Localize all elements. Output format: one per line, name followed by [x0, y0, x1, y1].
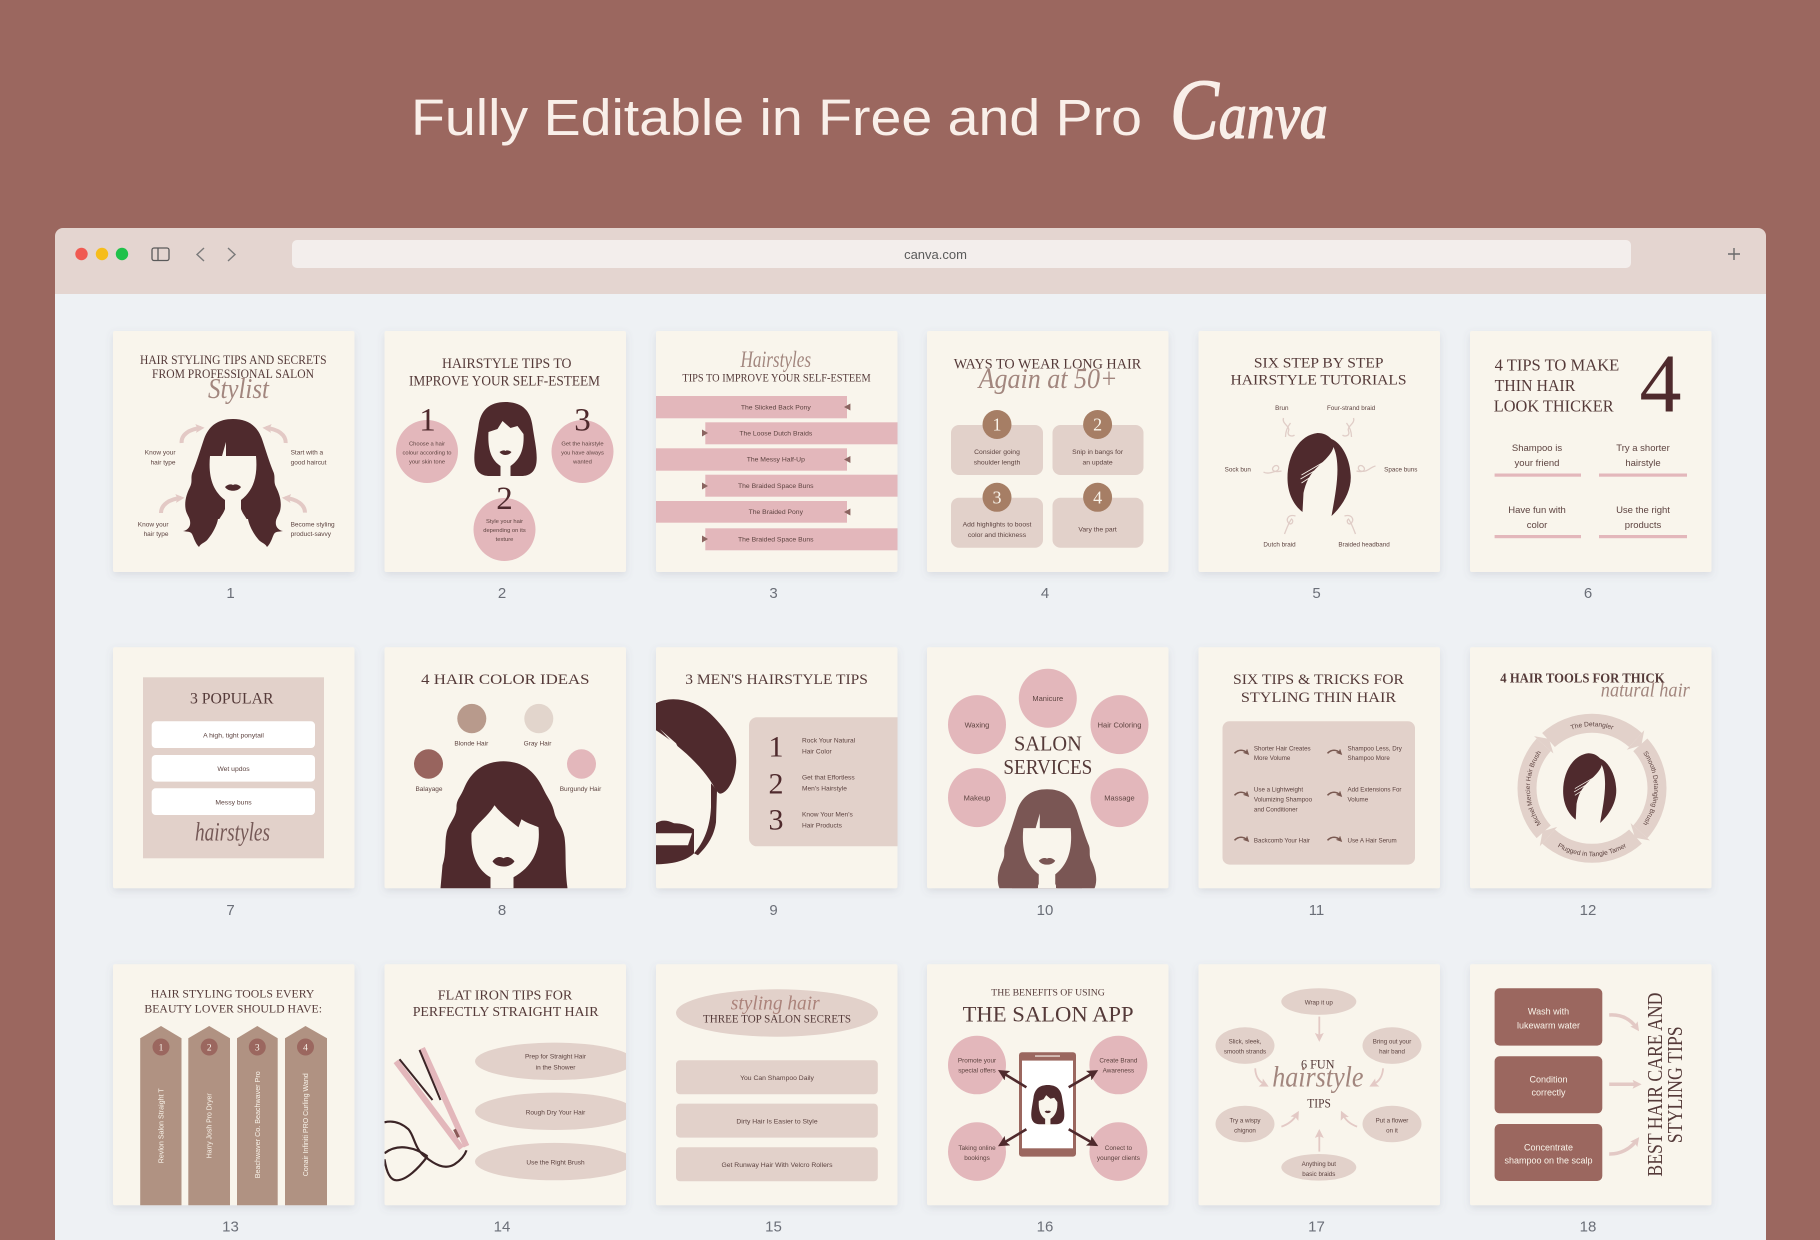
badge numbers: [159, 1043, 308, 1053]
service labels: Massage: [1104, 793, 1135, 802]
tip text: Men's Hairstyle: [802, 785, 847, 792]
colour swatches: [414, 704, 596, 779]
script word: Stylist: [208, 374, 270, 405]
tip text: Use A Hair Serum: [1348, 837, 1397, 844]
small arrows: [1234, 750, 1340, 840]
title: THREE TOP SALON SECRETS: [703, 1014, 851, 1026]
tip text: Add Extensions For: [1348, 786, 1402, 793]
labels: Space buns: [1384, 466, 1417, 474]
tips panel: [1222, 721, 1415, 865]
tip text: Volume: [1348, 796, 1369, 803]
idea text: chignon: [1234, 1127, 1256, 1134]
tip text: [963, 449, 1124, 539]
badge numbers: 4: [303, 1043, 308, 1053]
step numbers: [419, 403, 591, 517]
curved arrows: [161, 428, 305, 513]
swatch labels: Burgundy Hair: [560, 786, 602, 793]
title: [963, 989, 1134, 1026]
panel: card 16: [927, 964, 1168, 1205]
tip boxes: [951, 425, 1144, 548]
ring labels: [1525, 722, 1658, 857]
tip text: Hair Products: [802, 822, 843, 829]
tip text: Use a Lightweight: [1254, 786, 1303, 793]
tip text: shoulder length: [974, 460, 1020, 466]
centre title: hairstyle: [1272, 1061, 1364, 1094]
badge numbers: 3: [255, 1043, 260, 1053]
badge numbers: 1: [992, 414, 1002, 434]
panel: card 6: [1470, 331, 1712, 572]
ring labels: Michel Mercier Hair Brush: [1525, 751, 1541, 826]
tip text: Add highlights to boost: [963, 522, 1031, 528]
panel: card 10: [926, 648, 1170, 892]
headline: Fully Editable in Free and Pro: [411, 89, 1142, 146]
panel: card 5: [1198, 331, 1440, 572]
tips: color: [1527, 520, 1547, 531]
labels: product-savvy: [291, 531, 332, 538]
tip text: Condition: [1529, 1074, 1568, 1084]
card numbers: 16: [1037, 1218, 1053, 1236]
step numbers: 2: [496, 481, 513, 517]
tips: Use the right: [1616, 505, 1670, 516]
hair illustration: [440, 761, 568, 888]
tip text: Snip in bangs for: [1072, 449, 1124, 456]
browser window: [55, 228, 1766, 1240]
labels: Become styling: [291, 522, 335, 528]
title: HAIR STYLING TIPS AND SECRETS: [140, 352, 326, 367]
arrow columns: [140, 1026, 327, 1205]
benefit text: [958, 1057, 1140, 1162]
underlines: [1495, 474, 1687, 538]
tip text: an update: [1082, 460, 1113, 466]
icon: new tab plus: [1728, 248, 1740, 260]
badge numbers: [992, 414, 1102, 507]
tip text: More Volume: [1254, 755, 1291, 762]
card numbers: 11: [1309, 902, 1324, 919]
title: STYLING THIN HAIR: [1241, 690, 1396, 706]
braid icons: [1264, 418, 1376, 534]
labels: Brun: [1275, 405, 1289, 412]
card numbers: 9: [769, 902, 778, 919]
ribbon text: The Messy Half-Up: [747, 456, 805, 464]
title: BEAUTY LOVER SHOULD HAVE:: [144, 1001, 322, 1015]
tip text: [1254, 745, 1403, 844]
service labels: Makeup: [964, 793, 990, 802]
title: HAIRSTYLE TIPS TO: [442, 356, 572, 372]
badge numbers: 3: [992, 487, 1002, 507]
idea text: smooth strands: [1224, 1048, 1266, 1055]
ring labels: Plugged in Tangle Tamer: [1558, 843, 1626, 857]
ring labels: Smooth Detangling Brush: [1643, 751, 1658, 825]
title: [1233, 672, 1404, 706]
labels: Sock bun: [1225, 466, 1251, 474]
step text: colour according to: [403, 450, 451, 456]
tip text: [525, 1053, 587, 1166]
swatch labels: Gray Hair: [524, 740, 552, 747]
labels: Know your: [145, 450, 176, 456]
option text: Wet updos: [217, 766, 250, 773]
labels: Dutch braid: [1263, 542, 1296, 548]
panel: card 2: [384, 331, 626, 572]
tip text: Get that Effortless: [802, 774, 855, 781]
secret text: Dirty Hair Is Easier to Style: [736, 1118, 818, 1125]
tip numbers: 2: [768, 767, 784, 800]
title: [409, 356, 600, 390]
card numbers: 18: [1580, 1218, 1596, 1236]
tip text: Volumizing Shampoo: [1254, 796, 1313, 803]
tip text: Use the Right Brush: [526, 1159, 585, 1166]
tip text: Wash with: [1528, 1006, 1569, 1016]
step text: texture: [496, 537, 513, 543]
title: 3 MEN'S HAIRSTYLE TIPS: [685, 672, 868, 688]
title: SALON: [1014, 732, 1082, 756]
tip text: in the Shower: [536, 1064, 576, 1071]
script words: natural hair: [1601, 680, 1690, 702]
title: 4 HAIR COLOR IDEAS: [421, 672, 589, 688]
vertical labels: Conair Infiniti PRO Curling Wand: [303, 1073, 310, 1176]
card numbers: 6: [1584, 585, 1592, 602]
step text: you have always: [561, 450, 604, 456]
headline: [411, 63, 1328, 157]
vertical labels: Harry Josh Pro Dryer: [207, 1093, 214, 1158]
tip text: Rough Dry Your Hair: [526, 1109, 586, 1116]
title ellipse: [676, 989, 878, 1037]
secret text: You Can Shampoo Daily: [740, 1075, 815, 1082]
arrows: [1002, 1072, 1094, 1144]
step text: Get the hairstyle: [561, 442, 604, 448]
tips: Try a shorter: [1616, 443, 1670, 454]
service labels: Waxing: [965, 720, 989, 729]
script word: hairstyles: [195, 818, 270, 847]
title: THIN HAIR: [1495, 376, 1576, 395]
logo: Canva wordmark: Canva: [1170, 63, 1328, 157]
icon: back and forward chevrons: [197, 248, 235, 261]
tips: Shampoo is: [1512, 443, 1562, 454]
service labels: [964, 694, 1141, 802]
man's face illustration: [656, 699, 736, 864]
panel: card 18: [1470, 964, 1712, 1205]
vertical title: BEST HAIR CARE AND: [1643, 993, 1667, 1177]
idea text: Bring out your: [1373, 1038, 1411, 1045]
idea text: Slick, sleek,: [1229, 1038, 1262, 1045]
ribbon text: The Braided Space Buns: [738, 536, 814, 544]
title: TIPS TO IMPROVE YOUR SELF-ESTEEM: [682, 373, 871, 385]
secret boxes: [676, 1060, 878, 1181]
number badges: [982, 410, 1112, 512]
title: 4 HAIR TOOLS FOR THICK: [1500, 670, 1665, 685]
tip boxes: [1495, 988, 1602, 1181]
vertical labels: Beachwaver Co. Beachwaver Pro: [255, 1071, 262, 1178]
title: HAIR STYLING TOOLS EVERY: [151, 986, 315, 1000]
tip text: color and thickness: [968, 532, 1027, 539]
title: [413, 989, 599, 1020]
vertical labels: [158, 1071, 310, 1178]
tip numbers: 3: [768, 803, 784, 836]
service labels: Manicure: [1032, 694, 1063, 703]
tip text: Prep for Straight Hair: [525, 1053, 587, 1060]
card numbers: 7: [226, 902, 235, 919]
step circles: [396, 420, 614, 561]
ribbon text: [738, 404, 814, 544]
tip text: Shampoo Less, Dry: [1348, 745, 1403, 752]
tips: products: [1625, 520, 1661, 531]
secret text: Get Runway Hair With Velcro Rollers: [721, 1162, 833, 1169]
benefit text: bookings: [964, 1155, 990, 1162]
step numbers: 3: [574, 403, 591, 439]
title: FLAT IRON TIPS FOR: [438, 989, 573, 1004]
ribbon text: The Slicked Back Pony: [741, 404, 811, 412]
badge numbers: 2: [207, 1043, 212, 1053]
title: HAIRSTYLE TUTORIALS: [1230, 372, 1406, 388]
icon: flat iron: [384, 1048, 466, 1180]
card numbers: 14: [494, 1218, 510, 1236]
idea text: on it: [1386, 1127, 1398, 1134]
ribbon text: The Braided Pony: [749, 509, 804, 516]
swatch labels: [415, 740, 602, 793]
hair illustration: [1563, 753, 1616, 823]
card numbers: 8: [498, 902, 506, 919]
benefit text: younger clients: [1097, 1155, 1140, 1162]
benefit circles: [948, 1036, 1147, 1181]
service circles: [948, 669, 1148, 827]
idea text: hair band: [1379, 1048, 1405, 1055]
script words: Again at 50+: [977, 364, 1118, 395]
tips: hairstyle: [1625, 458, 1661, 469]
title: [1003, 732, 1092, 779]
arrows: [1255, 1017, 1383, 1152]
labels: Start with a: [291, 450, 323, 456]
tip text: correctly: [1531, 1087, 1566, 1097]
tip text: lukewarm water: [1517, 1020, 1580, 1030]
number badges: [152, 1038, 314, 1056]
swatch labels: Balayage: [415, 786, 443, 793]
hair illustration: [998, 789, 1096, 888]
inner panel: [143, 677, 324, 858]
tip text: Hair Color: [802, 748, 832, 755]
idea ellipses: [1216, 988, 1422, 1181]
card numbers: 2: [498, 585, 506, 602]
benefit text: Awareness: [1103, 1067, 1134, 1074]
panel: card 11: [1198, 647, 1440, 888]
card numbers: 1: [226, 585, 235, 602]
icon: sidebar: [152, 248, 169, 260]
badge numbers: 1: [159, 1043, 164, 1053]
labels: [138, 450, 335, 538]
script word: Hairstyles: [740, 347, 811, 372]
browser page area: [55, 294, 1766, 1240]
card numbers: 10: [1037, 902, 1053, 919]
idea text: Try a wispy: [1229, 1117, 1261, 1124]
panel: card 17: [1198, 964, 1440, 1205]
title: [1230, 355, 1406, 388]
vertical title: [1643, 993, 1687, 1177]
tip numbers: [768, 730, 784, 836]
panel: card 8: [384, 647, 626, 888]
benefit text: Taking online: [958, 1145, 996, 1152]
tip text: Concentrate: [1524, 1142, 1573, 1152]
tip text: shampoo on the scalp: [1504, 1155, 1593, 1165]
ring labels: The Detangler: [1570, 722, 1614, 730]
step text: your skin tone: [409, 460, 445, 466]
title: [140, 352, 326, 381]
option text: Messy buns: [215, 799, 252, 806]
idea text: Anything but: [1302, 1161, 1336, 1168]
icon: phone: [1019, 1052, 1076, 1157]
card numbers: 12: [1580, 902, 1596, 919]
address bar: [292, 240, 1631, 268]
labels: Braided headband: [1338, 542, 1390, 548]
window controls: [75, 248, 128, 260]
title: THE SALON APP: [963, 1001, 1134, 1026]
step text: wanted: [572, 460, 592, 466]
card numbers: 3: [769, 585, 778, 602]
tip text: Shorter Hair Creates: [1254, 745, 1311, 752]
idea text: Wrap it up: [1305, 999, 1333, 1006]
labels: Know your: [138, 522, 169, 528]
card numbers: 15: [765, 1218, 782, 1236]
ribbon bars: [656, 396, 898, 550]
tip text: Shampoo More: [1348, 755, 1390, 762]
title: SERVICES: [1003, 755, 1092, 779]
tip text: Consider going: [974, 449, 1020, 456]
step text: Style your hair: [486, 519, 523, 525]
script words: styling hair: [731, 992, 820, 1014]
tips: Have fun with: [1508, 505, 1566, 516]
title: IMPROVE YOUR SELF-ESTEEM: [409, 374, 600, 390]
title: WAYS TO WEAR LONG HAIR: [954, 356, 1142, 372]
title: 3 POPULAR: [190, 690, 274, 707]
step text: Choose a hair: [409, 442, 445, 448]
step text: [403, 442, 604, 543]
tip text: [802, 737, 856, 829]
labels: hair type: [151, 460, 176, 466]
address bar: canva.com: [904, 247, 967, 262]
badge numbers: 4: [1093, 487, 1102, 507]
labels: hair type: [144, 531, 169, 538]
tips: [1508, 443, 1670, 531]
labels: [1225, 405, 1417, 548]
card numbers: 17: [1308, 1218, 1325, 1236]
vertical title: STYLING TIPS: [1663, 1026, 1687, 1143]
panel: card 14: [384, 964, 634, 1205]
tips: your friend: [1515, 458, 1559, 469]
swatch labels: Blonde Hair: [454, 740, 489, 747]
secret text: [721, 1075, 833, 1169]
tips panel: [749, 717, 898, 846]
panel: card 9: [656, 647, 898, 888]
title: [1494, 356, 1619, 416]
panel: card 3: [656, 331, 898, 572]
tip text: Rock Your Natural: [802, 737, 856, 744]
panel: card 12: [1469, 648, 1712, 892]
vertical labels: Revlon Salon Straight T: [158, 1088, 166, 1163]
title: PERFECTLY STRAIGHT HAIR: [413, 1005, 599, 1020]
labels: good haircut: [291, 460, 327, 466]
tip text: and Conditioner: [1254, 806, 1298, 813]
browser toolbar: [55, 228, 1766, 294]
tip text: Backcomb Your Hair: [1254, 837, 1310, 844]
arrows: [1609, 1015, 1638, 1154]
tip ellipses: [475, 1043, 634, 1180]
card numbers: 4: [1041, 585, 1049, 602]
title: [144, 986, 322, 1015]
badge numbers: 2: [1093, 414, 1102, 434]
card numbers: 13: [222, 1218, 239, 1236]
benefit text: Conect to: [1105, 1145, 1133, 1152]
centre title: 6 FUN: [1301, 1056, 1335, 1071]
tip numbers: 1: [768, 730, 784, 763]
option text: [203, 732, 264, 806]
hair illustration: [1288, 433, 1351, 516]
panel: card 13: [113, 964, 354, 1205]
panel: card 15: [656, 964, 898, 1205]
big number: 4: [1640, 338, 1682, 431]
ribbon text: The Braided Space Buns: [738, 483, 814, 490]
benefit text: Create Brand: [1099, 1057, 1138, 1064]
panel: card 7: [113, 647, 354, 888]
service labels: Hair Coloring: [1098, 720, 1141, 729]
card numbers: [222, 585, 1596, 1236]
panel: card 4: [927, 331, 1168, 572]
ribbon arrows: [702, 404, 850, 542]
tip text: Vary the part: [1078, 526, 1117, 534]
ribbon text: The Loose Dutch Braids: [739, 430, 813, 438]
title: THE BENEFITS OF USING: [991, 989, 1105, 999]
idea text: Put a flower: [1376, 1117, 1408, 1124]
option text: A high, tight ponytail: [203, 732, 264, 739]
step numbers: 1: [419, 403, 436, 439]
title: FROM PROFESSIONAL SALON: [152, 366, 315, 381]
title: 4 TIPS TO MAKE: [1495, 356, 1619, 375]
title: SIX TIPS & TRICKS FOR: [1233, 672, 1404, 688]
hair illustration: [1027, 1082, 1069, 1126]
labels: Four-strand braid: [1327, 405, 1376, 412]
step text: depending on its: [483, 528, 526, 534]
centre title: [1272, 1056, 1364, 1110]
benefit text: special offers: [958, 1067, 996, 1074]
title: SIX STEP BY STEP: [1254, 355, 1384, 371]
card numbers: 5: [1312, 585, 1321, 602]
panel: card 1: [113, 331, 354, 572]
hair illustration: [474, 402, 537, 477]
hair illustration: [183, 419, 283, 547]
benefit text: Promote your: [958, 1057, 997, 1064]
centre title: TIPS: [1307, 1095, 1331, 1110]
circular arrows: [1527, 723, 1657, 853]
idea text: [1224, 999, 1411, 1178]
tip text: Know Your Men's: [802, 811, 853, 818]
idea text: basic braids: [1302, 1171, 1335, 1178]
tip text: [1504, 1006, 1593, 1165]
title: LOOK THICKER: [1494, 397, 1614, 416]
option boxes: [152, 721, 315, 815]
